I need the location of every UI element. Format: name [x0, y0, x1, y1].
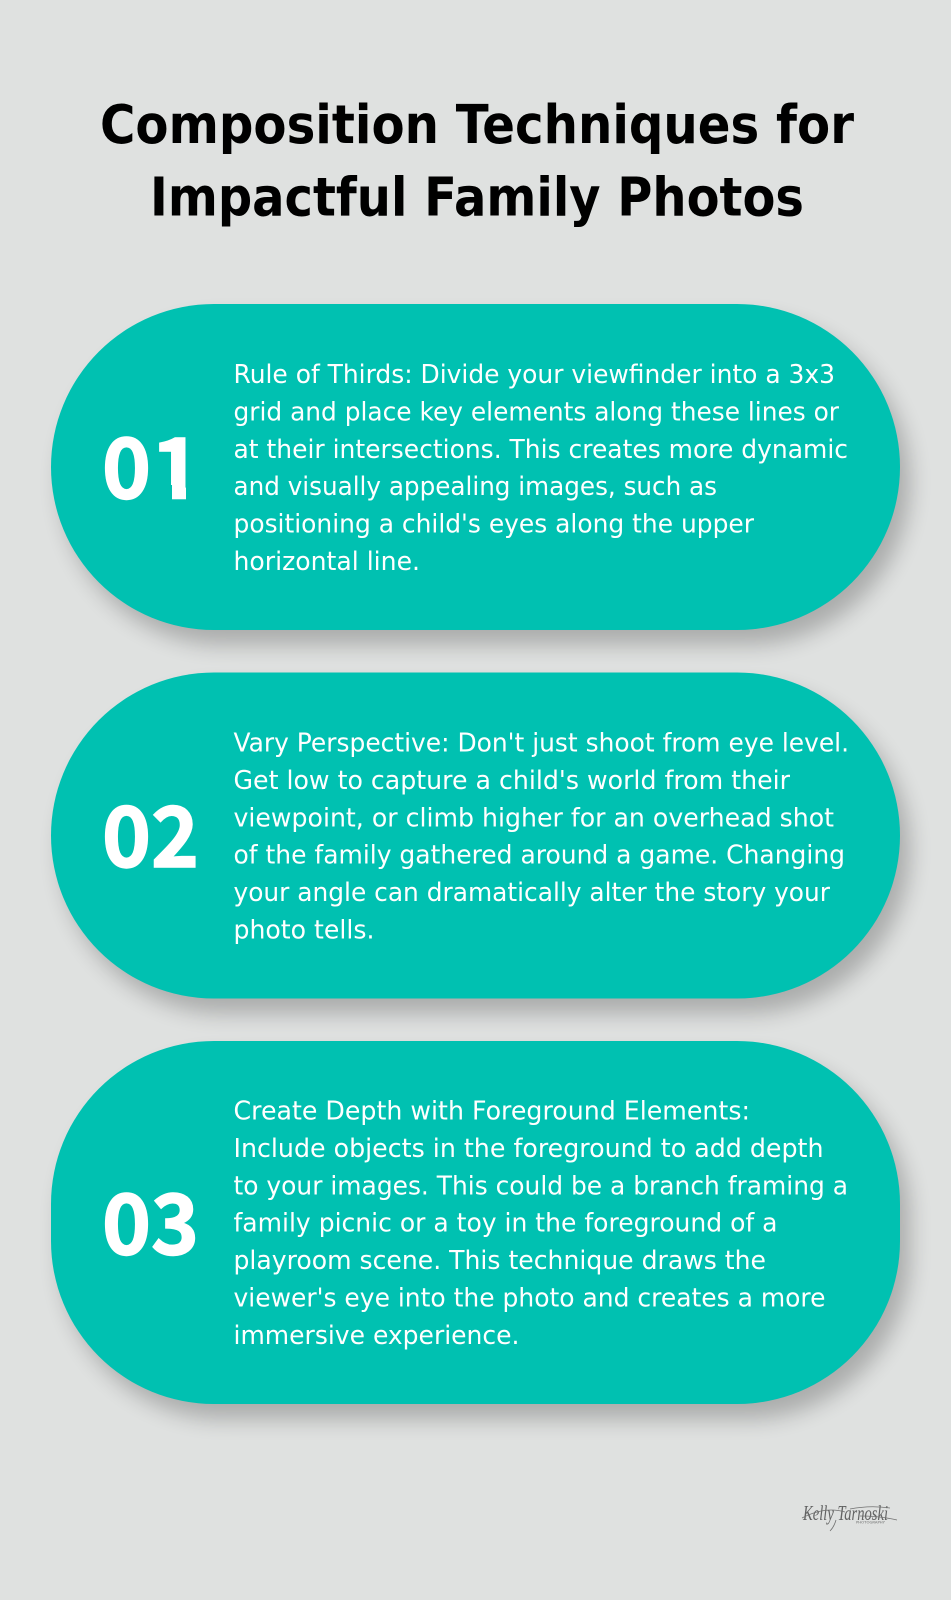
logo: signature: PHOTOGRAPHY [856, 1520, 886, 1524]
number 03 [102, 1158, 199, 1280]
text: vary perspective: Vary Perspective: Don't just shoot from eye level. [234, 728, 849, 758]
panel: vary perspective [51, 672, 910, 1014]
panel: rule of thirds [51, 304, 910, 645]
title: Composition Techniques for [100, 93, 855, 156]
text: rule of thirds: at their intersections. This creates more dynamic [234, 435, 848, 465]
text: create depth: to your images. This could be a branch framing a [234, 1171, 848, 1201]
text: vary perspective: of the family gathered around a game. Changing [234, 841, 845, 871]
number 01 [102, 402, 204, 524]
text: rule of thirds [234, 360, 848, 577]
number 01: 1 [150, 402, 202, 524]
text: create depth: immersive experience. [234, 1321, 520, 1351]
number 02: 2 [151, 771, 199, 892]
logo: signature [802, 1501, 897, 1531]
number 02 [102, 771, 199, 892]
text: rule of thirds: and visually appealing images, such as [234, 472, 717, 502]
text: vary perspective: viewpoint, or climb higher for an overhead shot [234, 803, 834, 833]
title [100, 93, 855, 228]
number 01: 0 [102, 402, 151, 524]
text: create depth: Create Depth with Foreground Elements: [234, 1096, 750, 1126]
text: rule of thirds: Rule of Thirds: Divide your viewfinder into a 3x3 [234, 360, 835, 390]
panel: create depth [51, 1041, 910, 1419]
number 02: 0 [102, 771, 151, 892]
number 03: 0 [102, 1158, 151, 1280]
text: vary perspective [234, 728, 849, 946]
text: create depth [234, 1096, 848, 1351]
text: vary perspective: Get low to capture a child's world from their [234, 766, 790, 796]
text: create depth: viewer's eye into the photo and creates a more [234, 1284, 826, 1314]
text: create depth: playroom scene. This technique draws the [234, 1246, 766, 1276]
text: rule of thirds: positioning a child's eyes along the upper [234, 510, 754, 540]
text: vary perspective: your angle can dramatically alter the story your [234, 878, 830, 908]
text: vary perspective: photo tells. [234, 916, 374, 946]
title: Impactful Family Photos [150, 166, 804, 228]
number 03: 3 [151, 1158, 199, 1280]
text: create depth: family picnic or a toy in the foreground of a [234, 1209, 778, 1239]
text: rule of thirds: grid and place key elements along these lines or [234, 397, 839, 427]
text: create depth: Include objects in the foreground to add depth [234, 1134, 824, 1164]
text: rule of thirds: horizontal line. [234, 547, 420, 577]
logo: signature: Kelly Tarnoski [802, 1501, 888, 1525]
